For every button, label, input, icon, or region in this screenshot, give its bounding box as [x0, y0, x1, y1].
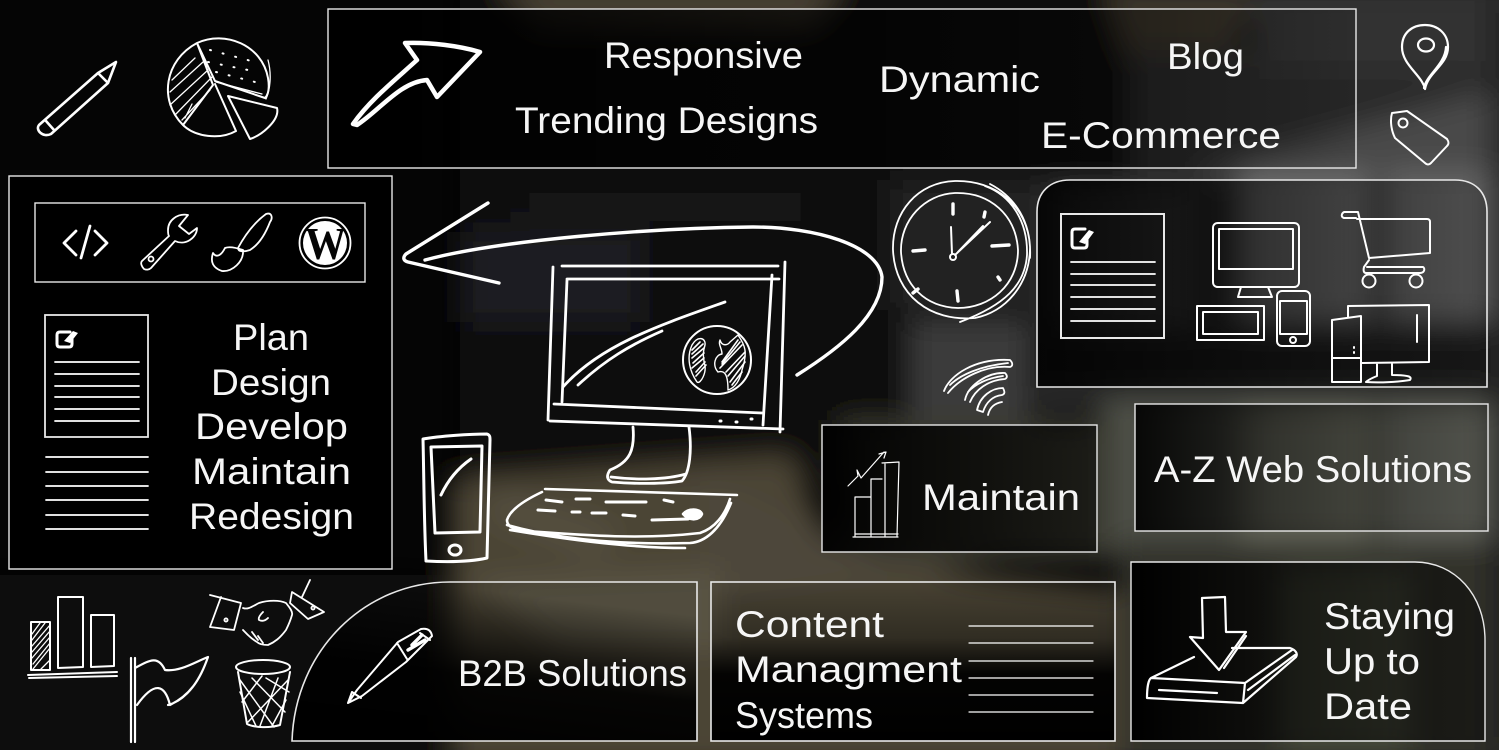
- icon: shopping cart: [1342, 212, 1430, 288]
- icon: globe: [683, 326, 751, 394]
- text: up to: Up to: [1324, 641, 1420, 682]
- heading: trending designs: Trending Designs: [515, 100, 818, 141]
- panel: staying up to date: [1131, 562, 1485, 741]
- icon: desktop computer: [1332, 305, 1429, 382]
- icon: desktop monitor: [548, 262, 785, 483]
- icon: monitor and devices: [1197, 223, 1310, 346]
- panel: tools: [35, 203, 365, 282]
- panel: a-z web solutions: [1135, 404, 1488, 531]
- icon: wordpress: W: [305, 218, 346, 269]
- icon: waste basket: [236, 660, 290, 727]
- panel: device solutions: [1037, 180, 1487, 387]
- heading: dynamic: Dynamic: [879, 59, 1040, 100]
- panel: b2b solutions: [292, 582, 697, 741]
- panel: content management systems: [711, 582, 1115, 741]
- icon: download to drive: [1147, 597, 1297, 703]
- text: a-z web solutions: A-Z Web Solutions: [1154, 449, 1472, 490]
- text: design: Design: [211, 362, 331, 403]
- panel: process: [9, 176, 392, 569]
- arrow: sweeping back to process: [404, 203, 882, 375]
- text: plan: Plan: [233, 317, 309, 358]
- icon: document: [45, 315, 148, 437]
- text: date: Date: [1324, 686, 1412, 727]
- text lines: [969, 626, 1093, 712]
- icon: brush: [212, 214, 272, 271]
- text: maintain: Maintain: [922, 477, 1080, 518]
- heading: responsive: Responsive: [604, 35, 803, 76]
- icon: bar chart: [28, 597, 117, 678]
- icon: growth chart: [848, 452, 899, 537]
- icon: marker pen: [348, 629, 432, 703]
- text: redesign: Redesign: [189, 496, 354, 537]
- icon: pencil: [38, 62, 116, 135]
- icon: code: [64, 226, 107, 258]
- icon: wrench: [141, 215, 197, 270]
- text: maintain: Maintain: [192, 451, 351, 492]
- icon: smartphone: [423, 434, 490, 562]
- icon: curved arrow: [353, 43, 480, 125]
- text lines: [46, 457, 148, 529]
- text: develop: Develop: [195, 406, 348, 447]
- icon: wifi: [944, 360, 1012, 415]
- panel: trending designs: [328, 9, 1356, 168]
- icon: keyboard: [507, 489, 737, 548]
- icon: flag: [131, 657, 208, 742]
- text: staying: Staying: [1324, 596, 1455, 637]
- text: content: Content: [735, 604, 885, 645]
- heading: e-commerce: E-Commerce: [1041, 115, 1281, 156]
- text: managment: Managment: [735, 649, 963, 690]
- panel: maintain: [822, 425, 1097, 552]
- icon: handshake: [210, 580, 324, 645]
- icon: clock: [893, 181, 1030, 322]
- heading: blog: Blog: [1167, 36, 1244, 77]
- icon: pie chart: [168, 38, 277, 139]
- text: b2b solutions: B2B Solutions: [458, 653, 687, 694]
- text: systems: Systems: [735, 695, 873, 736]
- icon: document: [1061, 214, 1164, 338]
- icon: map pin: [1402, 25, 1448, 89]
- icon: price tag: [1391, 111, 1448, 164]
